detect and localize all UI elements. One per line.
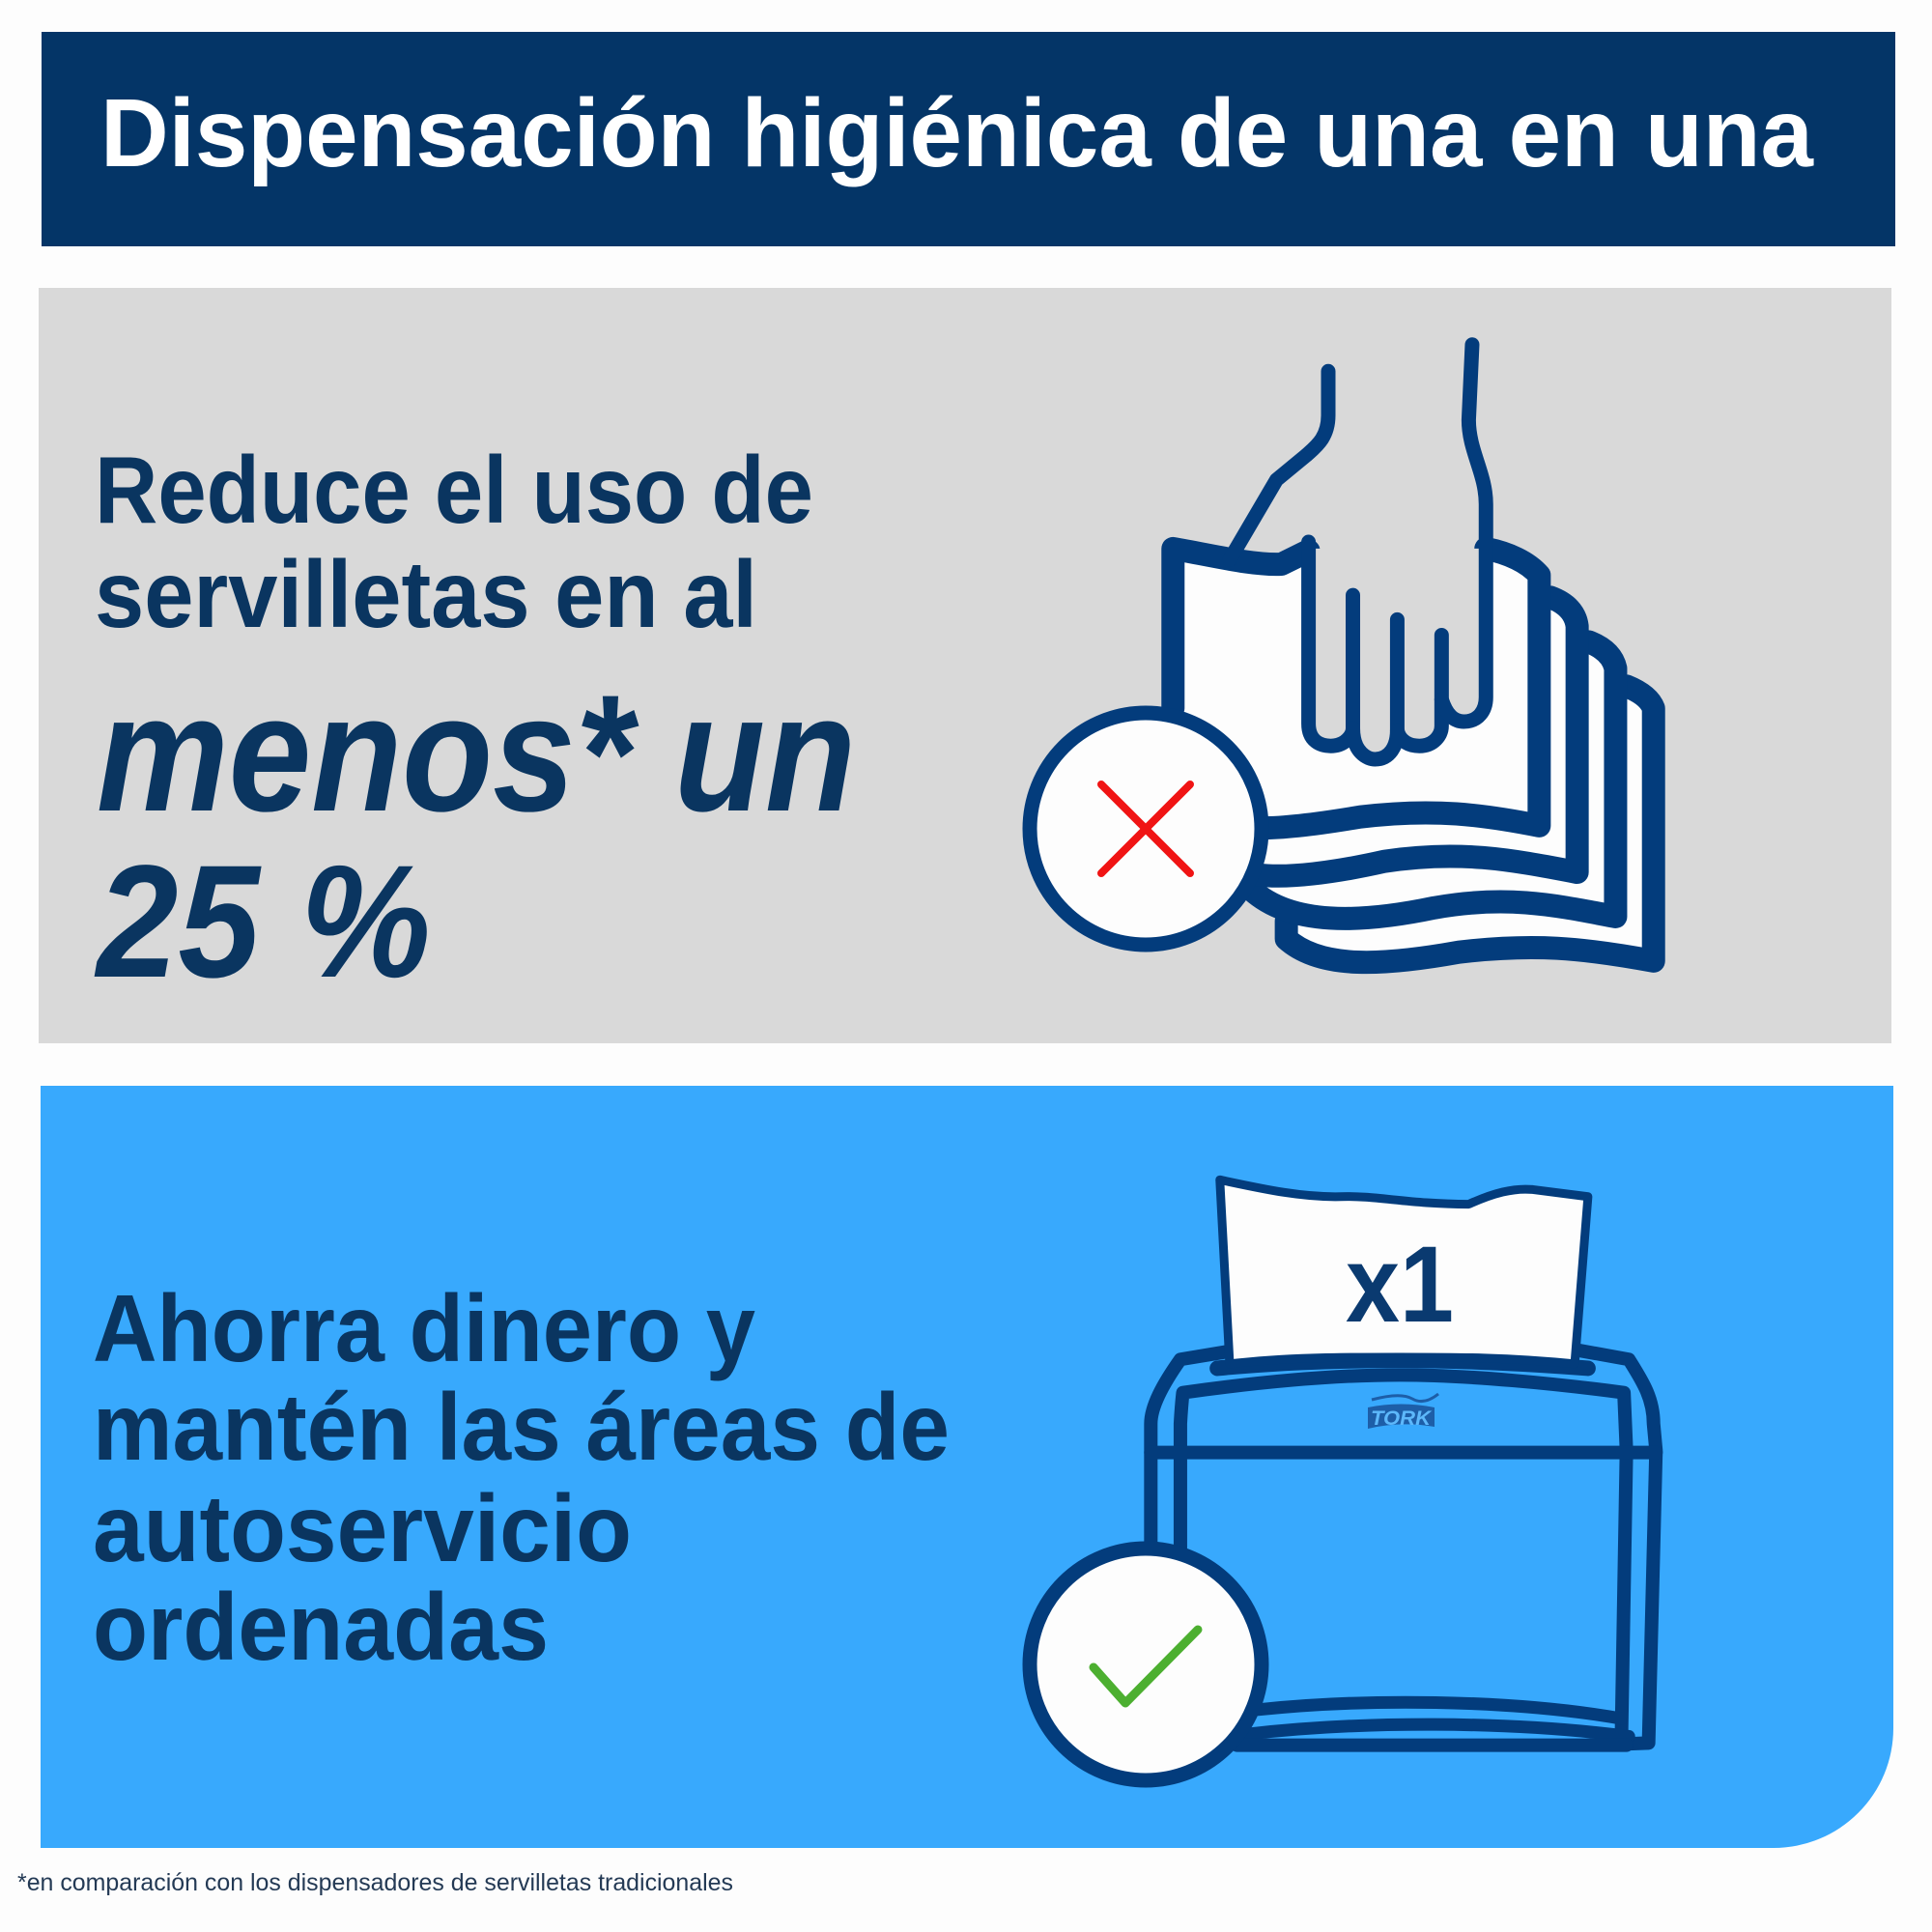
back napkin xyxy=(1287,686,1654,962)
second napkin xyxy=(1257,597,1577,876)
text block: reduce napkins: servilletas en al xyxy=(95,541,757,647)
dispenser body xyxy=(1151,1350,1656,1746)
text block: save money: autoservicio xyxy=(93,1475,632,1581)
icon: green check badge xyxy=(1030,1548,1262,1780)
hand xyxy=(1230,345,1486,759)
text block: reduce napkins: 25 % xyxy=(94,833,431,1011)
label: x1: x1 xyxy=(1346,1224,1454,1345)
icon: napkin dispenser xyxy=(1030,1179,1656,1780)
title: Dispensación higiénica de una en una xyxy=(100,79,1814,187)
text block: reduce napkins: Reduce el uso de xyxy=(95,437,813,543)
panel: save money xyxy=(41,1086,1893,1848)
napkin sheet xyxy=(1220,1179,1588,1364)
text block: save money: ordenadas xyxy=(93,1574,549,1680)
third napkin xyxy=(1252,641,1615,919)
icon: red cross badge xyxy=(1030,713,1262,945)
logo: Tork xyxy=(1368,1394,1438,1430)
panel: reduce napkin use xyxy=(39,288,1891,1043)
text block: save money: mantén las áreas de xyxy=(93,1374,950,1480)
text block: reduce napkins xyxy=(94,437,856,1011)
logo: Tork: TORK xyxy=(1371,1407,1433,1430)
text block: save money: Ahorra dinero y xyxy=(93,1275,755,1381)
icon: napkins pulled by hand xyxy=(1030,345,1654,962)
title banner xyxy=(42,32,1895,246)
footnote: *en comparación con los dispensadores de servilletas tradicionales xyxy=(17,1869,733,1896)
text block: reduce napkins: menos* un xyxy=(97,661,856,846)
text block: save money xyxy=(93,1275,950,1680)
front napkin xyxy=(1173,549,1539,828)
